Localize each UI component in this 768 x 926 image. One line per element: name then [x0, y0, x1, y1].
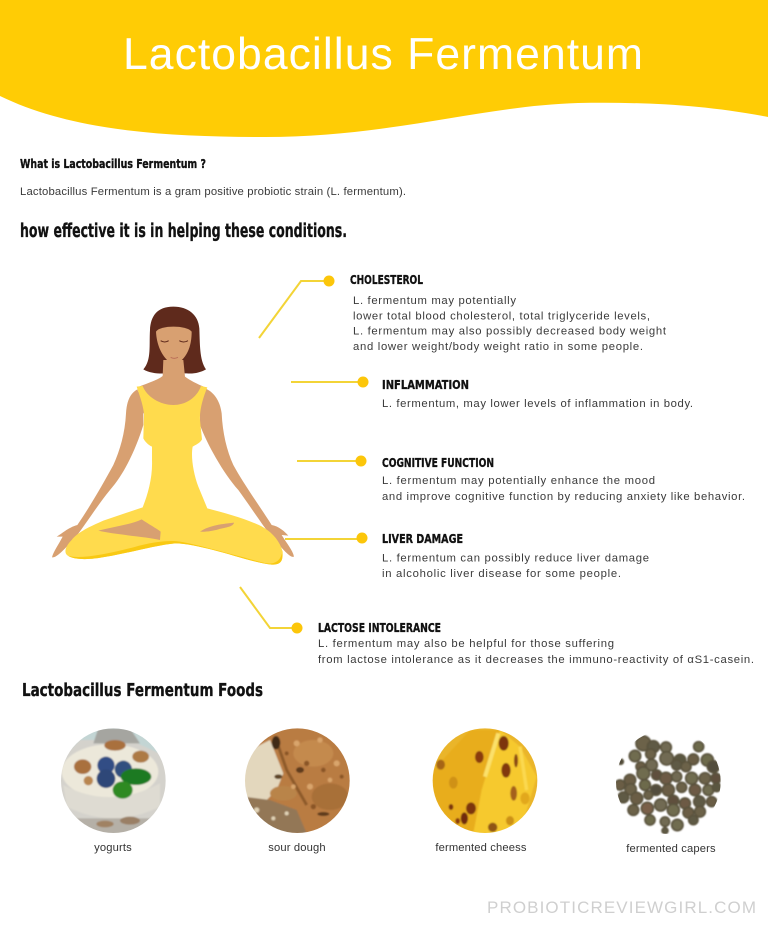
conditions heading: how effective it is in helping these conditions.	[20, 221, 347, 242]
intro text: Lactobacillus Fermentum is a gram positive probiotic strain (L. fermentum).	[20, 186, 406, 198]
inflammation text: L. fermentum, may lower levels of inflammation in body.	[382, 398, 693, 410]
cheese image	[430, 727, 540, 837]
watermark: PROBIOTICREVIEWGIRL.COM	[487, 898, 756, 917]
intro heading: What is Lactobacillus Fermentum ?	[20, 156, 206, 171]
food: fermented cheese	[430, 727, 540, 854]
food: sour dough	[243, 727, 352, 854]
lactose intolerance heading: LACTOSE INTOLERANCE	[318, 620, 441, 635]
yogurt image	[60, 727, 167, 837]
lactose intolerance text	[318, 638, 754, 666]
woman hair	[143, 307, 206, 374]
woman outfit shading	[68, 541, 282, 565]
lactose intolerance text: L. fermentum may also be helpful for those suffering	[318, 638, 614, 650]
cognitive function heading: COGNITIVE FUNCTION	[382, 455, 494, 470]
connector	[240, 587, 302, 634]
woman neck and chest	[137, 360, 205, 413]
liver damage text	[382, 552, 649, 580]
illustration: meditating woman	[52, 307, 294, 565]
capers label: fermented capers	[626, 843, 716, 855]
callout: inflammation	[291, 376, 693, 410]
woman facial features	[161, 341, 188, 358]
cognitive function text: and improve cognitive function by reducing anxiety like behavior.	[382, 491, 745, 503]
connector	[291, 376, 368, 388]
cognitive function text: L. fermentum may potentially enhance the mood	[382, 475, 655, 487]
sour dough image	[243, 727, 352, 835]
cholesterol text: and lower weight/body weight ratio in some people.	[353, 341, 643, 353]
liver damage text: in alcoholic liver disease for some people.	[382, 568, 621, 580]
callout: cholesterol	[259, 272, 667, 353]
liver damage heading: LIVER DAMAGE	[382, 531, 463, 546]
yogurt label: yogurts	[94, 842, 132, 854]
cholesterol text: L. fermentum may potentially	[353, 295, 516, 307]
liver damage text: L. fermentum can possibly reduce liver damage	[382, 552, 649, 564]
connector	[297, 456, 366, 466]
woman right arm	[200, 388, 294, 557]
callout: cognitive function	[297, 455, 745, 503]
woman face	[156, 327, 192, 365]
sour dough label: sour dough	[268, 842, 326, 854]
inflammation heading: INFLAMMATION	[382, 377, 469, 392]
connector	[259, 276, 334, 338]
cholesterol text: lower total blood cholesterol, total triglyceride levels,	[353, 310, 650, 322]
callout: lactose intolerance	[240, 587, 754, 666]
callout: liver damage	[285, 531, 649, 580]
woman feet	[98, 519, 234, 540]
cholesterol text	[353, 295, 667, 353]
cholesterol heading: CHOLESTEROL	[350, 272, 423, 287]
food: yogurt	[60, 727, 167, 854]
woman yellow outfit	[65, 386, 283, 565]
foods heading: Lactobacillus Fermentum Foods	[22, 680, 263, 701]
capers image	[615, 736, 721, 834]
title: Lactobacillus Fermentum	[123, 30, 643, 79]
cholesterol text: L. fermentum may also possibly decreased body weight	[353, 326, 667, 338]
cheese label: fermented cheess	[435, 842, 527, 854]
header wave banner	[0, 0, 768, 137]
lactose intolerance text: from lactose intolerance as it decreases the immuno-reactivity of αS1-casein.	[318, 654, 754, 666]
woman left arm	[52, 389, 143, 557]
food: fermented capers	[615, 736, 721, 855]
cognitive function text	[382, 475, 745, 503]
connector	[285, 532, 368, 544]
